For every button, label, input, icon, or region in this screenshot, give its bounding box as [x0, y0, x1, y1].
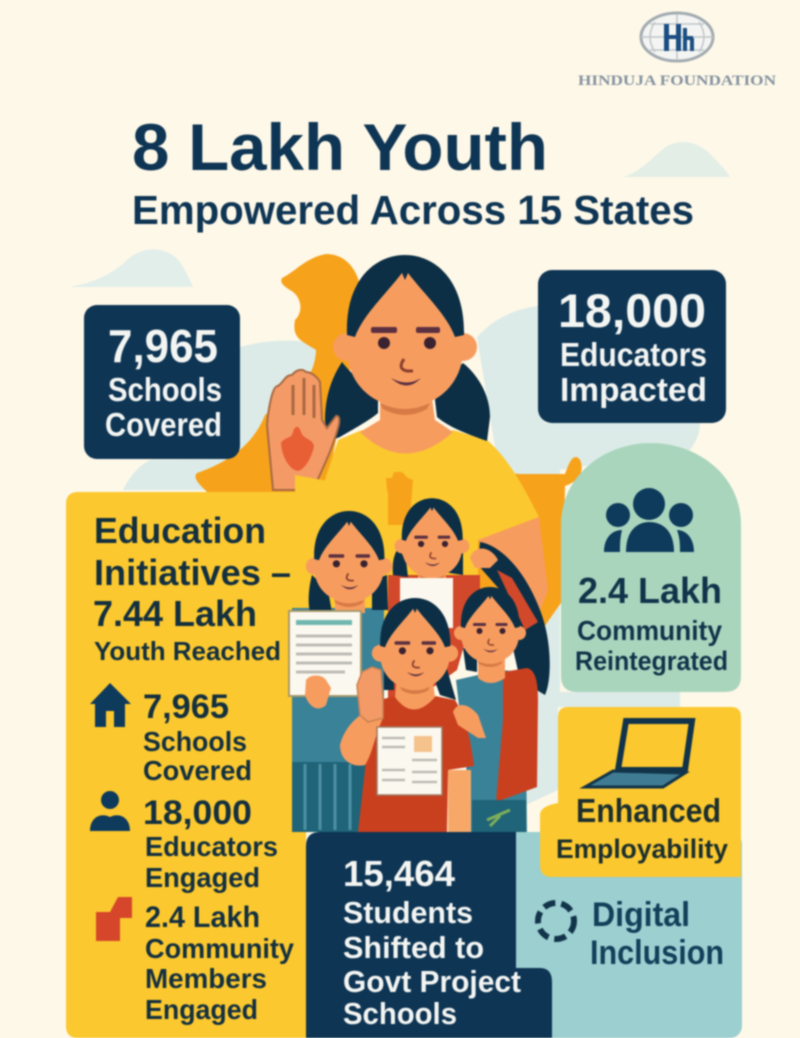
title: 8 Lakh Youth [132, 110, 548, 184]
education heading [93, 510, 291, 666]
digital inclusion label: Inclusion [590, 934, 724, 972]
callout: 18,000 educators impacted: Impacted [560, 371, 707, 408]
icon: house [90, 683, 131, 727]
India map silhouette [195, 254, 360, 495]
main girl figure [267, 255, 548, 625]
callout: 7,965 schools covered: Covered [105, 406, 222, 443]
India map east [470, 457, 582, 640]
stat: community members engaged: Engaged [145, 994, 258, 1025]
stat: schools covered: Covered [143, 755, 252, 786]
panel: students shifted [306, 832, 552, 1038]
main girl lower hair [325, 362, 490, 442]
stat: educators engaged [143, 794, 278, 893]
stat: community members engaged: Members [145, 963, 267, 994]
callout: 18,000 educators impacted [538, 270, 726, 423]
callout: 7,965 schools covered: 7,965 [108, 320, 218, 372]
logo: Hinduja Foundation [578, 13, 776, 89]
left student paper [289, 611, 361, 696]
stat: educators engaged: Educators [145, 831, 278, 862]
stat: educators engaged: 18,000 [143, 794, 252, 832]
student group illustration [289, 498, 550, 832]
front student book [377, 727, 442, 795]
icon: upward arrow [96, 897, 132, 941]
panel: community reintegrated: Community [577, 615, 722, 646]
stat: community members engaged: Community [145, 933, 294, 964]
logo globe [641, 13, 713, 61]
small raised hand on shirt [386, 472, 413, 525]
panel: community reintegrated [561, 443, 741, 692]
callout: 18,000 educators impacted: Educators [560, 336, 707, 373]
panel: enhanced employability: Enhanced [576, 792, 721, 829]
stat: educators engaged: Engaged [145, 862, 260, 893]
stat: community members engaged: 2.4 Lakh [145, 901, 260, 934]
digital inclusion label [590, 896, 724, 972]
callout: 18,000 educators impacted: 18,000 [558, 284, 706, 337]
salmon arm [478, 517, 548, 625]
panel: students shifted: Students [343, 895, 473, 930]
icon: person [90, 791, 130, 831]
logo wordmark: HINDUJA FOUNDATION [578, 73, 776, 89]
panel: students shifted: Govt Project [343, 964, 521, 999]
front student [340, 598, 486, 832]
head of main girl [333, 255, 477, 415]
education heading: 7.44 Lakh [93, 593, 257, 634]
shirt [300, 430, 539, 620]
background clouds and hills [70, 142, 730, 805]
panel: enhanced employability: Employability [556, 834, 728, 864]
panel: enhanced employability [540, 707, 741, 877]
raised hand with red mark [267, 370, 339, 490]
stat: schools covered: Schools [143, 726, 247, 757]
callout: 7,965 schools covered: Schools [108, 371, 222, 408]
stat: schools covered [143, 688, 252, 786]
callout: 7,965 schools covered [84, 305, 240, 459]
left student [289, 511, 392, 832]
back student [388, 498, 480, 720]
subtitle: Empowered Across 15 States [132, 187, 694, 233]
back student paper [400, 578, 453, 628]
icon: community group [604, 488, 694, 552]
panel: education initiatives [66, 475, 388, 1038]
right student [454, 542, 550, 832]
panel: digital inclusion [500, 832, 742, 1038]
panel: students shifted: Schools [343, 996, 457, 1031]
digital inclusion label: Digital [592, 896, 690, 934]
stat: community members engaged [145, 901, 294, 1025]
panel: students shifted: Shifted to [343, 930, 484, 965]
education heading: Initiatives – [94, 552, 291, 593]
education heading: Education [94, 510, 266, 551]
education heading: Youth Reached [94, 636, 281, 666]
stat: schools covered: 7,965 [143, 688, 229, 726]
panel: students shifted: 15,464 [343, 853, 455, 894]
main girl neck [360, 398, 453, 454]
icon: digital ring [538, 903, 574, 939]
icon: laptop [585, 721, 692, 787]
panel: community reintegrated: 2.4 Lakh [578, 570, 722, 611]
title [132, 110, 694, 233]
panel: community reintegrated: Reintegrated [575, 646, 728, 676]
